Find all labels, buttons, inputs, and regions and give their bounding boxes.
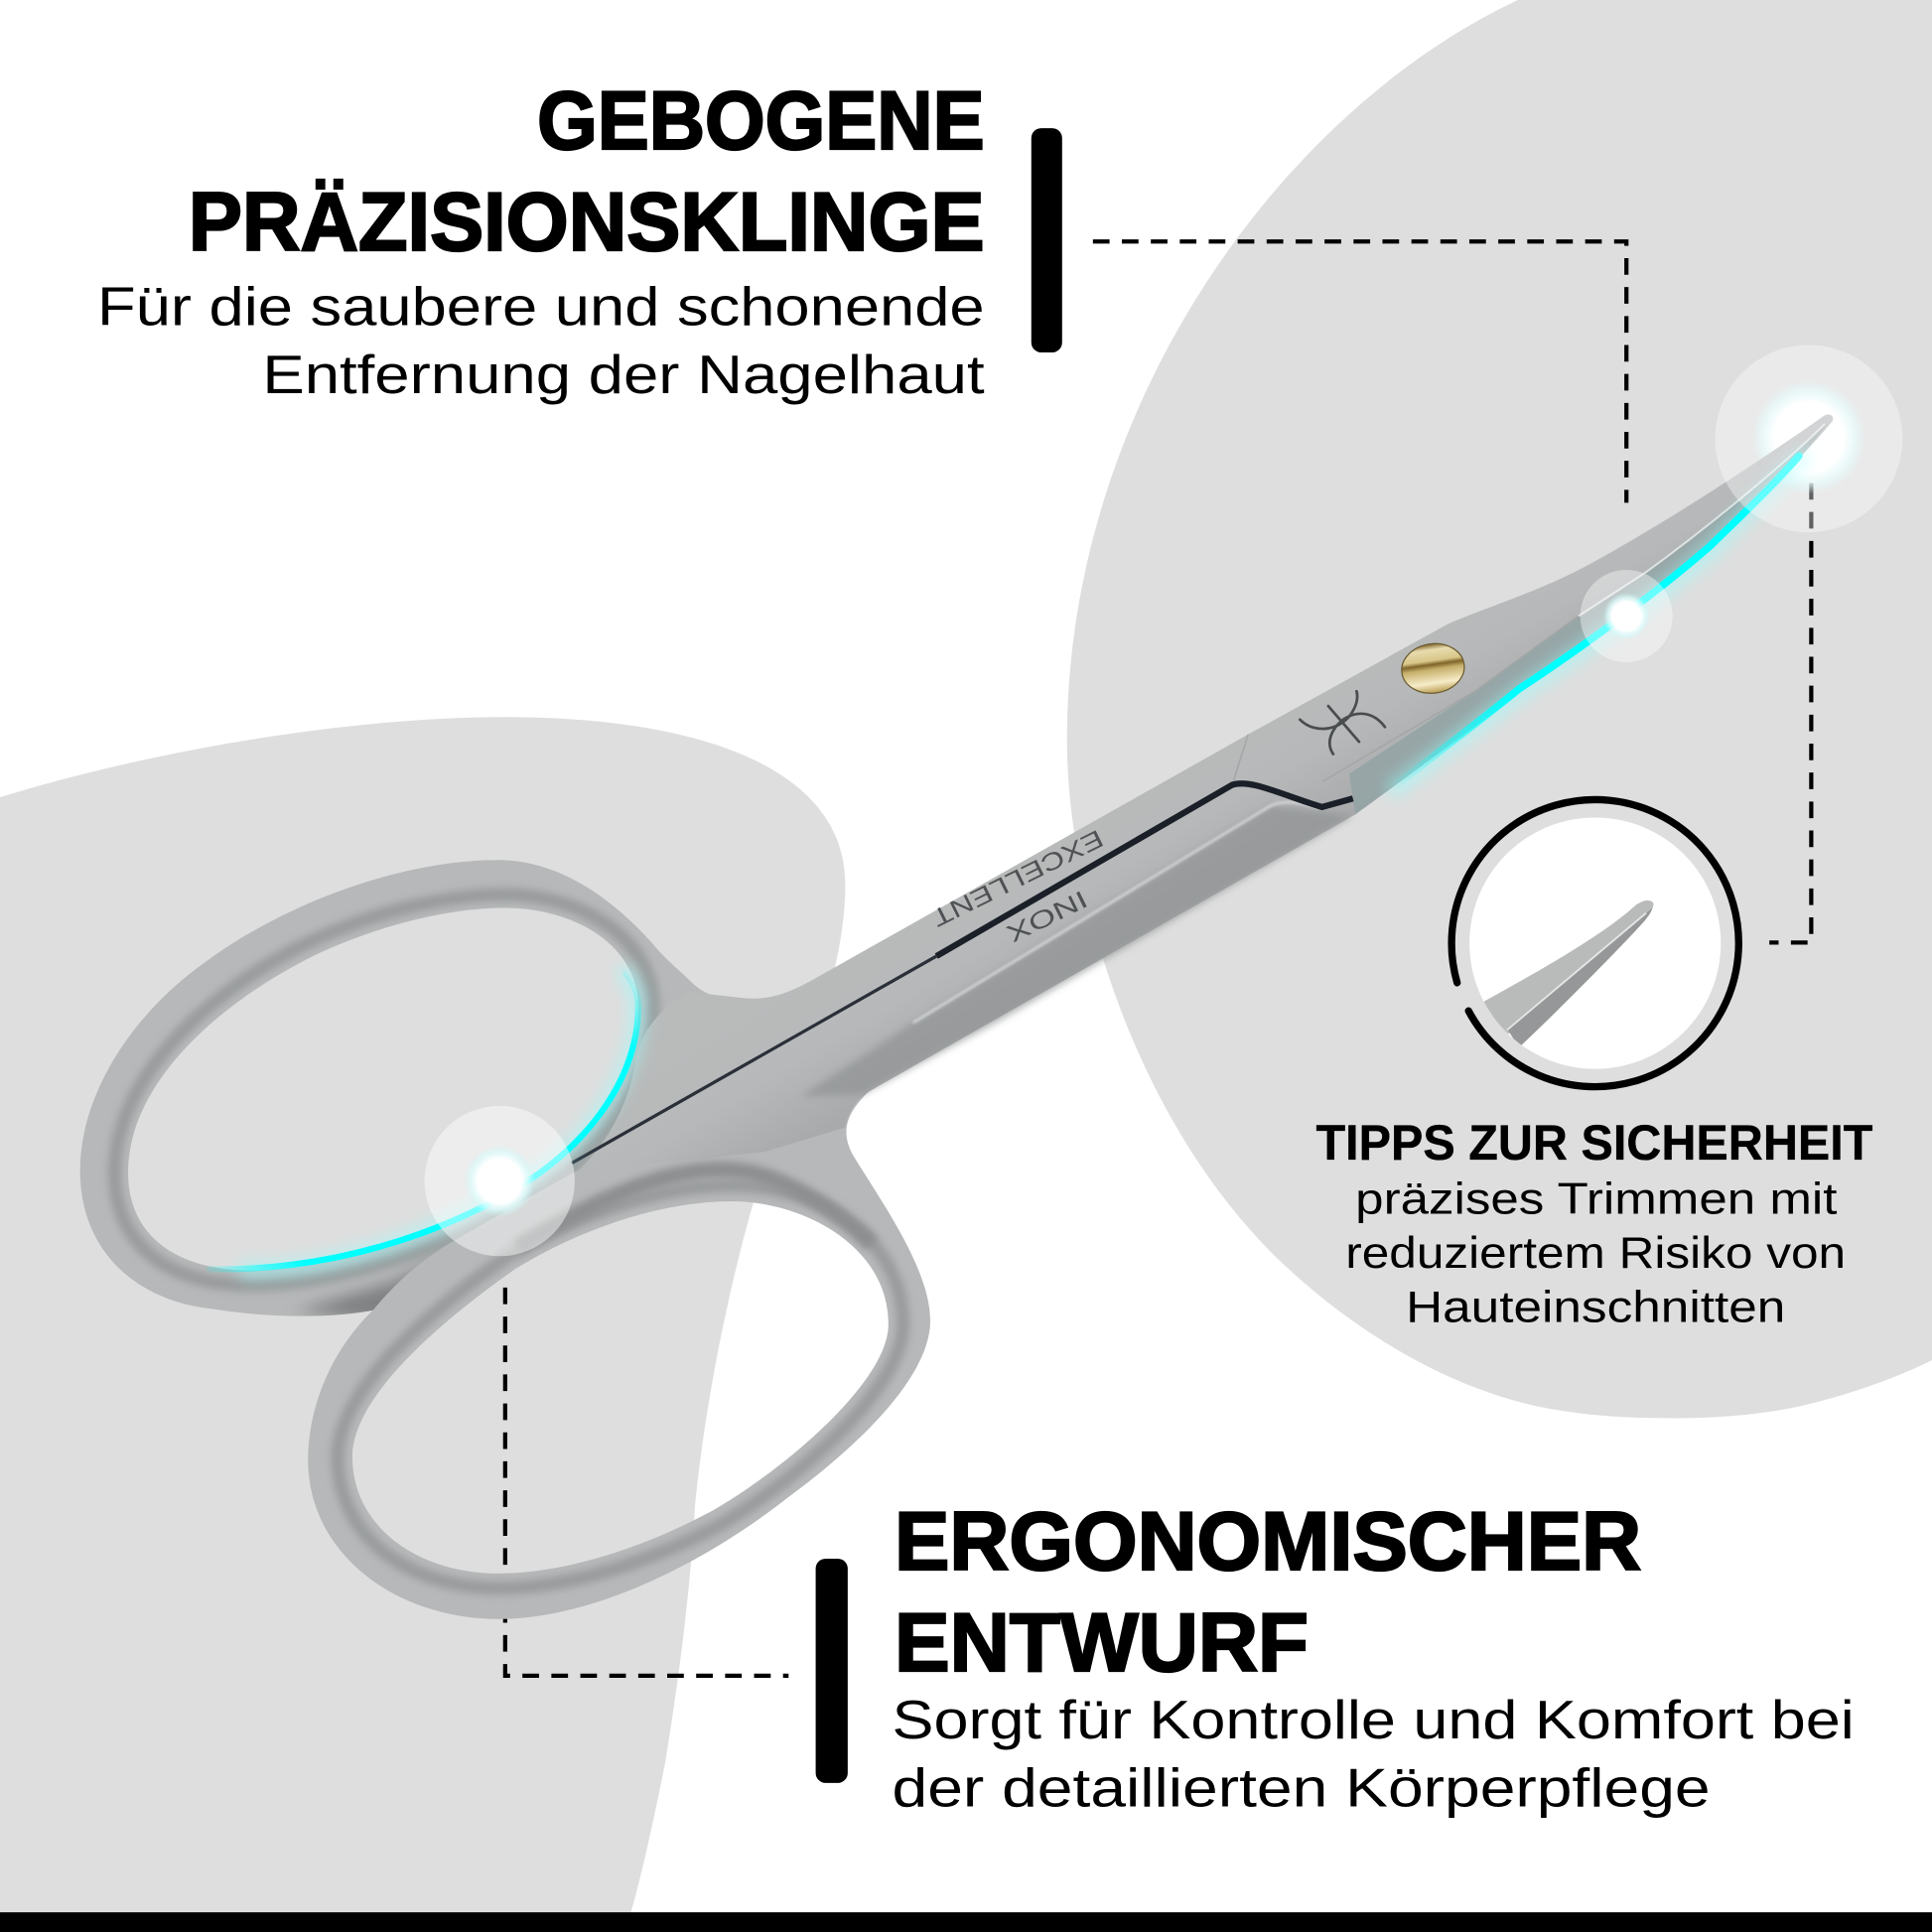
- ring bevel over shank: [517, 1170, 873, 1247]
- heading: Ergonomischer Entwurf: [816, 1495, 1855, 1818]
- hotspot: blade tip: [1716, 345, 1902, 532]
- white disc: [1469, 817, 1721, 1069]
- callout line 2: reduziertem Risiko von: [1345, 1229, 1846, 1278]
- finger ring: upper: [79, 860, 743, 1316]
- dashed connector: blade tip to detail circle: [1769, 483, 1811, 942]
- blade ridge highlight: [1579, 424, 1825, 617]
- title line 2: PRÄZISIONSKLINGE: [189, 176, 985, 268]
- icon: engraved logo: [1300, 691, 1385, 755]
- body line 1: Sorgt für Kontrolle und Komfort bei: [893, 1690, 1855, 1750]
- heading: Gebogene Präzisionsklinge: [97, 74, 1062, 405]
- cyan highlight: finger ring: [209, 973, 638, 1271]
- scissors illustration: [80, 414, 1833, 1619]
- heading accent bar: [1032, 128, 1062, 352]
- blade lower bevel: [1349, 423, 1829, 814]
- pivot screw: [1399, 639, 1467, 697]
- engraved text: EXCELLENT: EXCELLENT: [927, 824, 1107, 931]
- lower arm shading: [801, 806, 1353, 1097]
- callout line 1: präzises Trimmen mit: [1355, 1174, 1838, 1223]
- blade gap dark slit: [936, 783, 1353, 956]
- blade gap line: [572, 956, 936, 1164]
- callout line 3: Hauteinschnitten: [1406, 1284, 1785, 1332]
- circle frame: [1418, 765, 1773, 1121]
- lower arm ridge highlight: [913, 802, 1318, 1023]
- body line 2: Entfernung der Nagelhaut: [262, 345, 985, 405]
- callout title: TIPPS ZUR SICHERHEIT: [1315, 1115, 1872, 1171]
- background blob: left: [0, 717, 845, 1912]
- title line 2: ENTWURF: [895, 1596, 1309, 1689]
- hotspot: ring: [425, 1106, 575, 1256]
- dashed connector: handle to bottom heading: [505, 1288, 788, 1676]
- engraved text: INOX: INOX: [1002, 885, 1091, 947]
- body line 1: Für die saubere und schonende: [97, 277, 985, 338]
- bottom black bar: [0, 1912, 1932, 1932]
- hotspot core: blade tip: [1752, 380, 1865, 494]
- cyan highlight: blade edge: [1395, 456, 1801, 788]
- callout: Tipps zur Sicherheit: [1315, 1115, 1872, 1332]
- background blob: right: [1067, 0, 1932, 1418]
- body line 2: der detaillierten Körperpflege: [893, 1757, 1711, 1818]
- title line 1: GEBOGENE: [537, 74, 985, 167]
- title line 1: ERGONOMISCHER: [895, 1495, 1641, 1587]
- pivot plate outline: [1233, 617, 1579, 781]
- hotspot: mid blade: [1581, 570, 1673, 662]
- detail circle: blade tip: [1448, 796, 1742, 1090]
- dashed connector: top heading to blade: [1093, 241, 1626, 502]
- shank and blade: [579, 414, 1833, 1171]
- zoomed tip: [1483, 900, 1654, 1044]
- heading accent bar: [816, 1559, 848, 1783]
- finger ring: lower: [308, 1090, 930, 1619]
